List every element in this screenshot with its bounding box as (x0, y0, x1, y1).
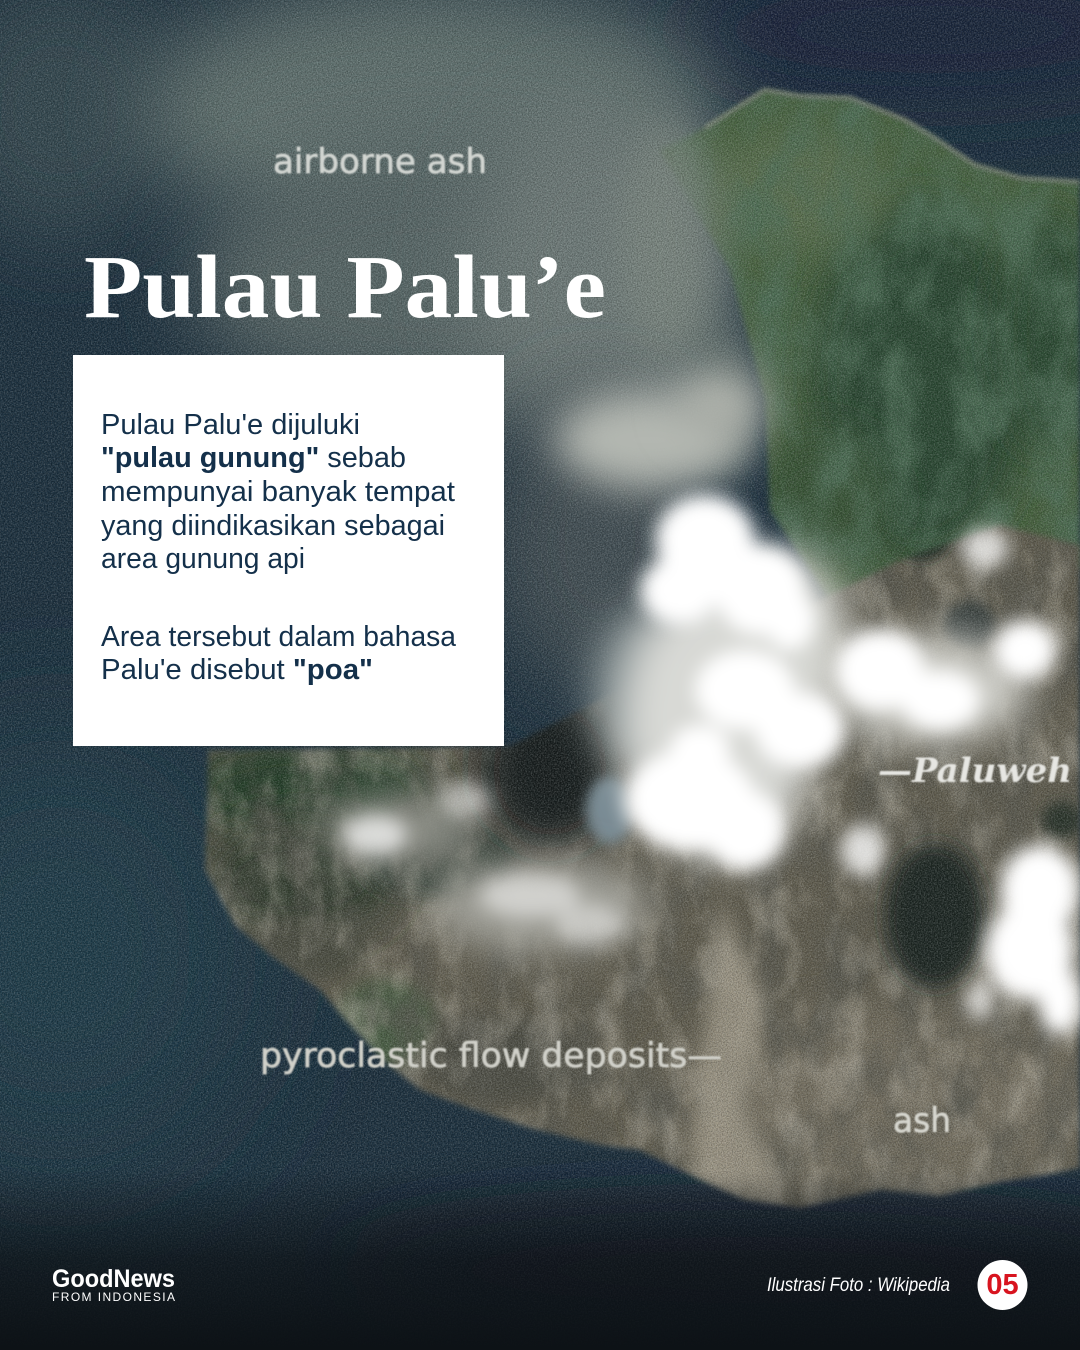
panel: description (73, 355, 504, 746)
text block: pulau gunung: "pulau gunung" sebab (101, 442, 406, 474)
logo: GoodNews from Indonesia (52, 1265, 175, 1304)
airborne ash veil, behind land (140, 0, 720, 240)
logo: GoodNews from Indonesia: GoodNews (52, 1265, 175, 1293)
panel background (73, 355, 504, 746)
bottom dark fade (0, 1170, 1080, 1350)
photo credit: Ilustrasi Foto : Wikipedia (767, 1275, 950, 1296)
photo label: ash: ash (893, 1101, 951, 1141)
text block: pulau gunung: mempunyai banyak tempat (101, 476, 455, 508)
north slope, green (662, 88, 1080, 594)
text block: poa (101, 621, 457, 686)
haze drifting over the north slope (620, 120, 720, 360)
page number badge: 05 (986, 1269, 1019, 1301)
title: Pulau Palu’e (84, 238, 606, 337)
photo label: pyroclastic flow deposits: pyroclastic flow deposits— (260, 1036, 722, 1076)
text block: pulau gunung (101, 409, 455, 575)
text block: pulau gunung: area gunung api (101, 543, 305, 575)
text block: pulau gunung: Pulau Palu'e dijuluki (101, 409, 360, 441)
text block: poa: Palu'e disebut "poa" (101, 654, 373, 686)
clouds: haze layer (320, 370, 1030, 951)
photo label: Paluweh: —Paluweh (878, 751, 1072, 791)
logo: GoodNews from Indonesia: FROM INDONESIA (52, 1290, 175, 1304)
page number badge (978, 1260, 1028, 1310)
north coastline (705, 90, 1080, 182)
south slope, ash deposits (180, 510, 1080, 1220)
photo label: airborne ash: airborne ash (273, 142, 487, 182)
clouds: bright puffs (343, 495, 1080, 1035)
text block: poa: Area tersebut dalam bahasa (101, 621, 457, 653)
text block: pulau gunung: yang diindikasikan sebagai (101, 510, 445, 542)
